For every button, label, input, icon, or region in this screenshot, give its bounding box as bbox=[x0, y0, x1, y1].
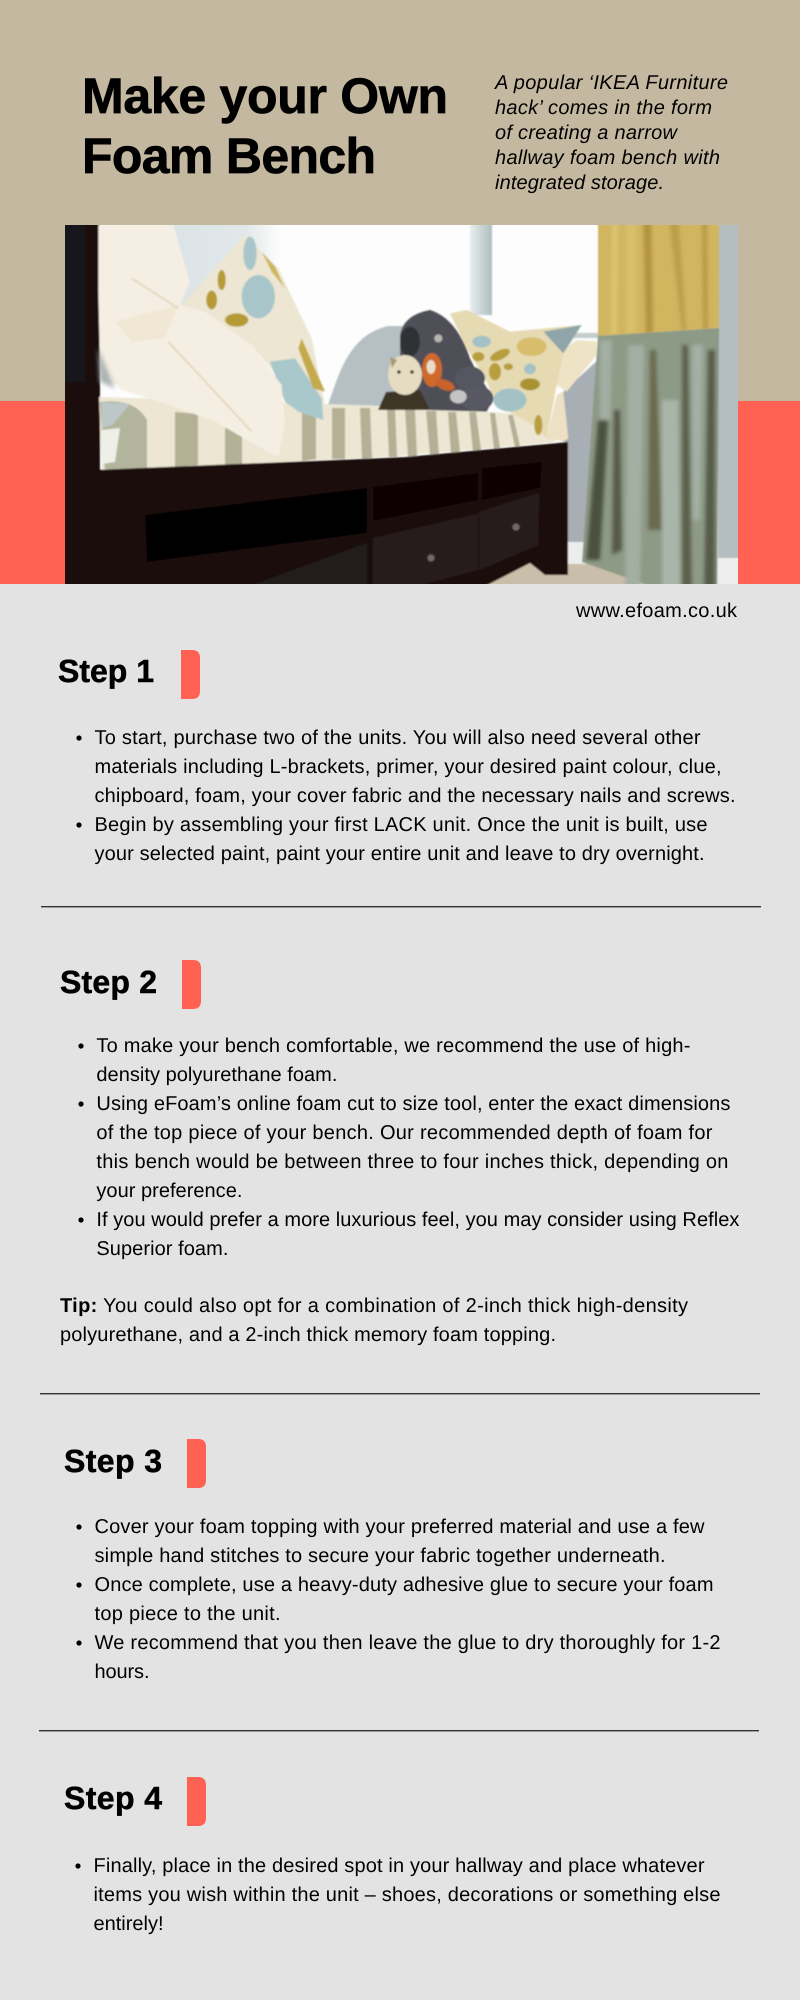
intro text: of creating a narrow bbox=[495, 122, 679, 144]
intro text: A popular ‘IKEA Furniture bbox=[494, 72, 728, 94]
intro text bbox=[494, 72, 728, 194]
step 1 bullet list: Begin by assembling your first LACK unit. Once the unit is built, use bbox=[94, 814, 708, 836]
intro text: hack’ comes in the form bbox=[495, 97, 712, 119]
step 3 bullet list: simple hand stitches to secure your fabric together underneath. bbox=[94, 1545, 666, 1567]
step 1 bullet list bbox=[76, 727, 735, 865]
step 1 bullet list: your selected paint, paint your entire unit and leave to dry overnight. bbox=[94, 843, 704, 865]
bench body bbox=[95, 442, 568, 600]
coral band behind photo bbox=[0, 401, 800, 584]
panel: step 1 bbox=[58, 650, 736, 865]
step 3 bullet list: hours. bbox=[94, 1661, 150, 1683]
step 3 coral tab bbox=[187, 1439, 206, 1488]
step 3 bullet list: Once complete, use a heavy-duty adhesive glue to secure your foam bbox=[94, 1574, 714, 1596]
step 2 heading: Step 2 bbox=[60, 964, 157, 1000]
photo: window bench with cushions and curtain bbox=[65, 225, 738, 584]
intro text: hallway foam bench with bbox=[495, 147, 720, 169]
step 4 bullet list: items you wish within the unit – shoes, decorations or something else bbox=[94, 1884, 720, 1906]
step 2 bullet list: this bench would be between three to four inches thick, depending on bbox=[96, 1151, 728, 1173]
step 3 bullet list: Cover your foam topping with your preferred material and use a few bbox=[94, 1516, 705, 1538]
fox toy bbox=[422, 353, 456, 393]
tiger toy bbox=[378, 355, 430, 410]
step 2 bullet list: If you would prefer a more luxurious feel, you may consider using Reflex bbox=[96, 1209, 739, 1231]
title: Foam Bench bbox=[82, 128, 376, 184]
website url: www.efoam.co.uk bbox=[575, 600, 738, 622]
step 2 bullet list bbox=[78, 1035, 739, 1260]
step 4 bullet list bbox=[75, 1855, 720, 1935]
elephant toy bbox=[400, 310, 493, 412]
white pillow bbox=[98, 225, 285, 457]
bench post bbox=[65, 225, 102, 584]
tip: polyurethane, and a 2-inch thick memory foam topping. bbox=[60, 1324, 556, 1346]
panel: step 4 bbox=[64, 1777, 720, 1935]
step 2 bullet list: Superior foam. bbox=[96, 1238, 228, 1260]
step 2 bullet list: density polyurethane foam. bbox=[96, 1064, 337, 1086]
step 1 bullet list: chipboard, foam, your cover fabric and the necessary nails and screws. bbox=[94, 785, 736, 807]
step 2 bullet list: your preference. bbox=[96, 1180, 242, 1202]
wall blob behind toys bbox=[328, 325, 403, 406]
curtain bbox=[582, 210, 719, 600]
panel: step 2 bbox=[60, 960, 739, 1346]
intro text: integrated storage. bbox=[495, 172, 664, 194]
step 1 bullet list: materials including L-brackets, primer, your desired paint colour, clue, bbox=[94, 756, 722, 778]
step 2 coral tab bbox=[182, 960, 201, 1009]
cushion bbox=[99, 397, 557, 471]
step 3 heading: Step 3 bbox=[64, 1443, 162, 1479]
floral pillow right and cream cushion bbox=[450, 310, 597, 442]
step 3 bullet list: We recommend that you then leave the glue to dry thoroughly for 1-2 bbox=[94, 1632, 720, 1654]
step 1 heading: Step 1 bbox=[58, 653, 154, 689]
step 2 bullet list: of the top piece of your bench. Our recommended depth of foam for bbox=[96, 1122, 713, 1144]
step 4 bullet list: entirely! bbox=[94, 1913, 164, 1935]
title: Make your Own bbox=[82, 68, 448, 124]
title bbox=[82, 68, 448, 184]
panel: step 3 bbox=[64, 1439, 720, 1683]
step 1 bullet list: To start, purchase two of the units. You will also need several other bbox=[94, 727, 701, 749]
step 1 coral tab bbox=[181, 650, 200, 699]
step 3 bullet list: top piece to the unit. bbox=[94, 1603, 280, 1625]
step 2 bullet list: To make your bench comfortable, we recommend the use of high- bbox=[96, 1035, 690, 1057]
tip: Tip: You could also opt for a combination of 2-inch thick high-density bbox=[60, 1295, 688, 1317]
step 4 coral tab bbox=[187, 1777, 206, 1826]
step 4 bullet list: Finally, place in the desired spot in your hallway and place whatever bbox=[94, 1855, 705, 1877]
tip bbox=[60, 1295, 688, 1346]
header band bbox=[0, 0, 800, 401]
step 3 bullet list bbox=[76, 1516, 720, 1683]
step 4 heading: Step 4 bbox=[64, 1780, 162, 1816]
step 2 bullet list: Using eFoam’s online foam cut to size tool, enter the exact dimensions bbox=[96, 1093, 730, 1115]
floral pillow left bbox=[182, 235, 328, 422]
